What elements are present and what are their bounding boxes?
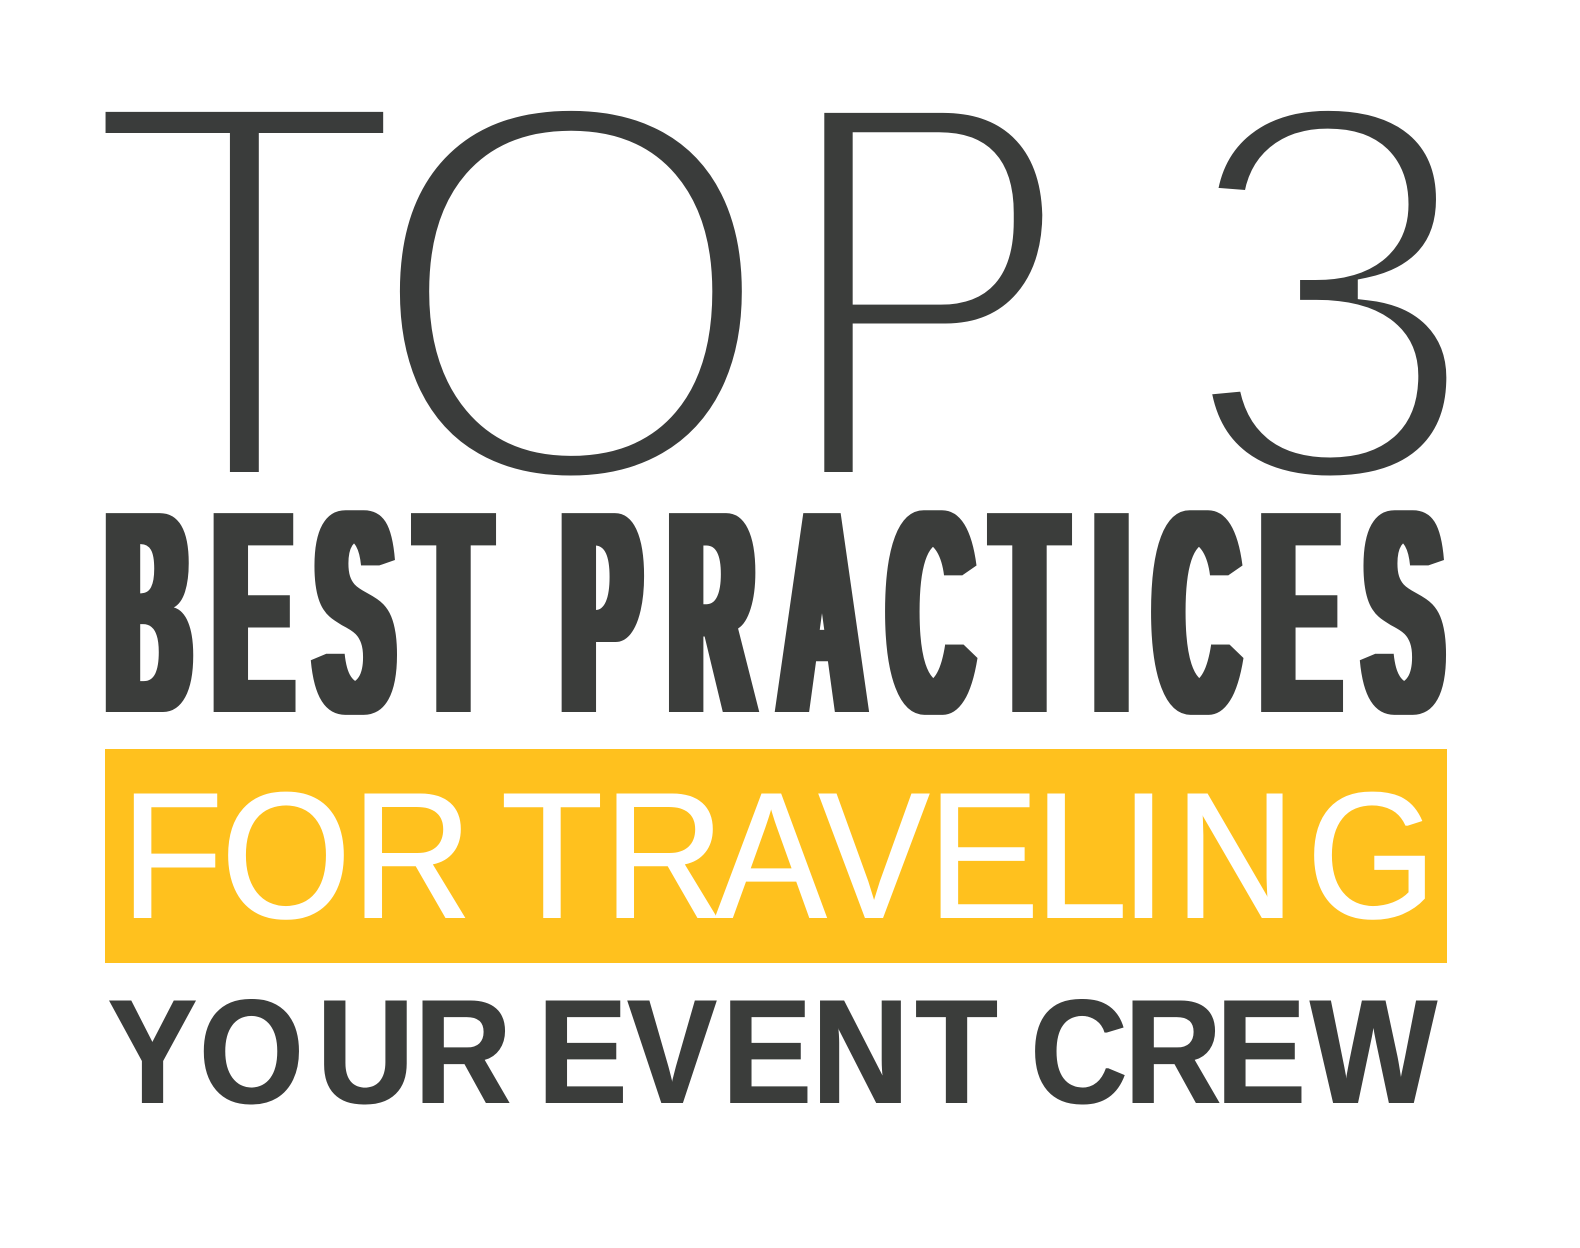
heading: BEST PRACTICES: BEST PRACTICES bbox=[107, 450, 1441, 774]
heading: TOP 3: O bbox=[364, 0, 778, 597]
heading: TOP 3: 3 bbox=[1179, 0, 1481, 597]
heading: TOP 3 bbox=[84, 0, 1481, 601]
subheading: YOUR EVENT CREW: YOUR EVENT CREW bbox=[108, 970, 1437, 1136]
yellow banner: FOR TRAVELING: FOR TRAVELING bbox=[121, 755, 1436, 957]
heading: TOP 3: P bbox=[783, 0, 1071, 601]
